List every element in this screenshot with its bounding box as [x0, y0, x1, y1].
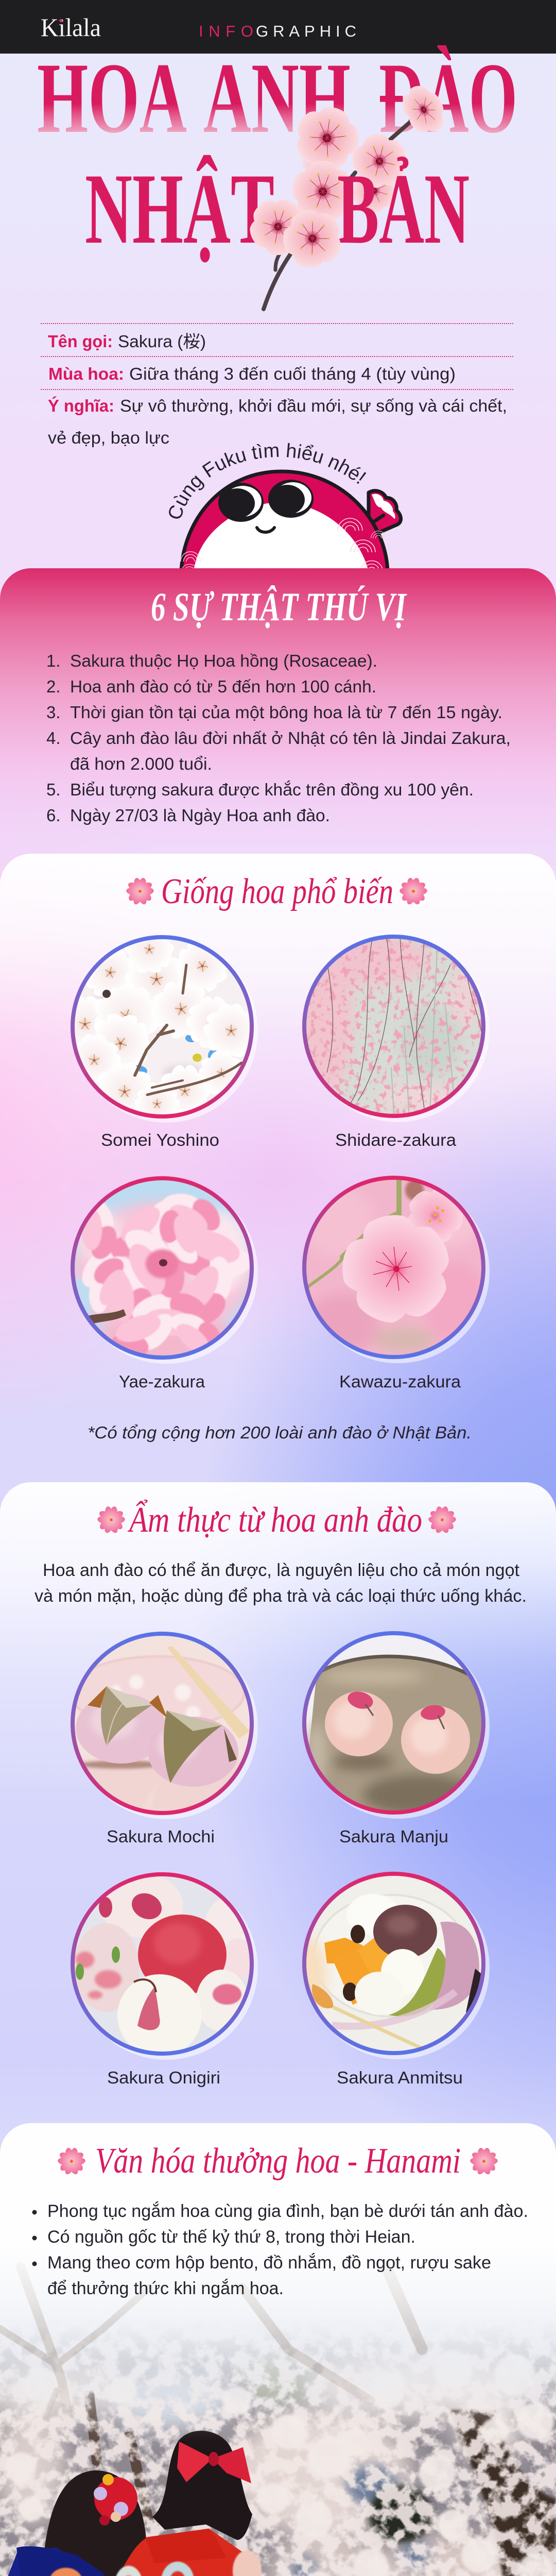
fin: [369, 491, 401, 533]
logo: Kilala: Kilala: [41, 13, 101, 42]
intro paragraph: [34, 1561, 527, 1606]
label: Shidare-zakura: Shidare-zakura: [335, 1130, 457, 1149]
facts list: 4.: [46, 728, 61, 748]
panel: six facts: [0, 568, 556, 866]
top header bar: [0, 0, 556, 54]
intro paragraph: và món mặn, hoặc dùng để pha trà và các loại thức uống khác.: [34, 1586, 527, 1606]
facts list: 3.: [46, 703, 61, 722]
row: season: Giữa tháng 3 đến cuối tháng 4 (tùy vùng): [129, 364, 456, 383]
row: meaning: vẻ đẹp, bạo lực: [48, 428, 169, 447]
bow: [177, 2442, 251, 2483]
photo: Sakura Manju: [302, 1631, 490, 1819]
icon: sakura branch: [264, 76, 454, 309]
facts list: đã hơn 2.000 tuổi.: [70, 754, 212, 773]
photo: Sakura Anmitsu: [286, 1872, 490, 2059]
facts list: Ngày 27/03 là Ngày Hoa anh đào.: [70, 806, 330, 825]
photo: Sakura Mochi: [70, 1632, 258, 1819]
row: season: Mùa hoa:: [48, 364, 124, 383]
photo: Sakura Onigiri: [71, 1872, 258, 2060]
row: name: Tên gọi:: [48, 332, 113, 351]
facts list: 1.: [46, 651, 61, 670]
panel: popular varieties: [0, 854, 556, 1442]
photo: hanami scene with two girls in kimono: [0, 2215, 556, 2576]
label: Kawazu-zakura: Kawazu-zakura: [339, 1372, 461, 1391]
photo: Yae-zakura: [71, 1176, 258, 1364]
photo: Shidare-zakura: [301, 934, 490, 1122]
label: Sakura Onigiri: Sakura Onigiri: [107, 2068, 220, 2087]
label: infographic: GRAPHIC: [256, 22, 356, 40]
row: meaning: Ý nghĩa:: [48, 396, 114, 415]
panel: cuisine: [0, 1482, 556, 2087]
photo: Kawazu-zakura: [301, 1176, 490, 1363]
title line two left: NHẬT: [85, 153, 274, 265]
eyes: [218, 480, 314, 522]
hanami list: [32, 2201, 528, 2298]
facts list: Biểu tượng sakura được khắc trên đồng xu 100 yên.: [70, 780, 474, 799]
title line two right: BẢN: [337, 153, 470, 265]
facts list: 6.: [46, 806, 61, 825]
right girl: [98, 2431, 317, 2576]
hanami list: Có nguồn gốc từ thế kỷ thứ 8, trong thời Heian.: [47, 2227, 415, 2247]
facts list: Thời gian tồn tại của một bông hoa là từ 7 đến 15 ngày.: [70, 703, 502, 722]
photo: Somei Yoshino: [71, 935, 258, 1123]
label: Sakura Anmitsu: Sakura Anmitsu: [337, 2068, 463, 2087]
facts list: 5.: [46, 780, 61, 799]
label: Somei Yoshino: Somei Yoshino: [101, 1130, 219, 1149]
hair ornament: [94, 2474, 137, 2526]
curved caption: Cùng Fuku tìm hiểu nhé!: [169, 443, 367, 519]
info rows: [41, 324, 513, 447]
label: Sakura Manju: Sakura Manju: [339, 1827, 448, 1846]
title with sakura branch: [37, 42, 517, 309]
hanami list: để thưởng thức khi ngắm hoa.: [47, 2279, 284, 2298]
row: name: Sakura (桜): [118, 332, 206, 351]
row: meaning: [48, 396, 507, 447]
heading: popular varieties: Giống hoa phổ biến: [161, 872, 393, 911]
icon: front blossoms: [235, 187, 356, 282]
note: *Có tổng cộng hơn 200 loài anh đào ở Nhật Bản.: [88, 1423, 472, 1442]
facts list: Sakura thuộc Họ Hoa hồng (Rosaceae).: [70, 651, 377, 670]
facts list: Cây anh đào lâu đời nhất ở Nhật có tên là Jindai Zakura,: [70, 728, 511, 748]
facts list: Hoa anh đào có từ 5 đến hơn 100 cánh.: [70, 677, 376, 696]
heading: six facts: 6 SỰ THẬT THÚ VỊ: [151, 584, 407, 629]
smile: [257, 528, 274, 532]
facts list: 2.: [46, 677, 61, 696]
kimono patterns: [114, 2550, 311, 2576]
label: Sakura Mochi: Sakura Mochi: [107, 1827, 215, 1846]
row: name: [48, 332, 206, 351]
title line one: [37, 42, 517, 154]
title line one: ANH: [203, 42, 351, 154]
row: meaning: Sự vô thường, khởi đầu mới, sự sống và cái chết,: [120, 396, 507, 415]
label: infographic: [199, 22, 356, 40]
label: infographic: INFO: [199, 22, 253, 40]
left girl: [0, 2470, 147, 2576]
label: Yae-zakura: Yae-zakura: [119, 1372, 205, 1391]
blossom texture: [0, 2318, 556, 2576]
heading: hanami: Văn hóa thưởng hoa - Hanami: [95, 2141, 461, 2181]
body: [181, 471, 388, 573]
panel: hanami: [0, 2123, 556, 2452]
hanami list: Phong tục ngắm hoa cùng gia đình, bạn bè dưới tán anh đào.: [47, 2201, 528, 2221]
intro paragraph: Hoa anh đào có thể ăn được, là nguyên liệu cho cả món ngọt: [43, 1561, 520, 1580]
facts list: [46, 651, 511, 825]
hanami list: Mang theo cơm hộp bento, đồ nhắm, đồ ngọt, rượu sake: [47, 2253, 491, 2273]
mascot Fuku: [169, 443, 403, 568]
heading: cuisine: Ẩm thực từ hoa anh đào: [128, 1500, 422, 1540]
background trees: [0, 2267, 556, 2576]
title line one: HOA: [37, 42, 187, 154]
